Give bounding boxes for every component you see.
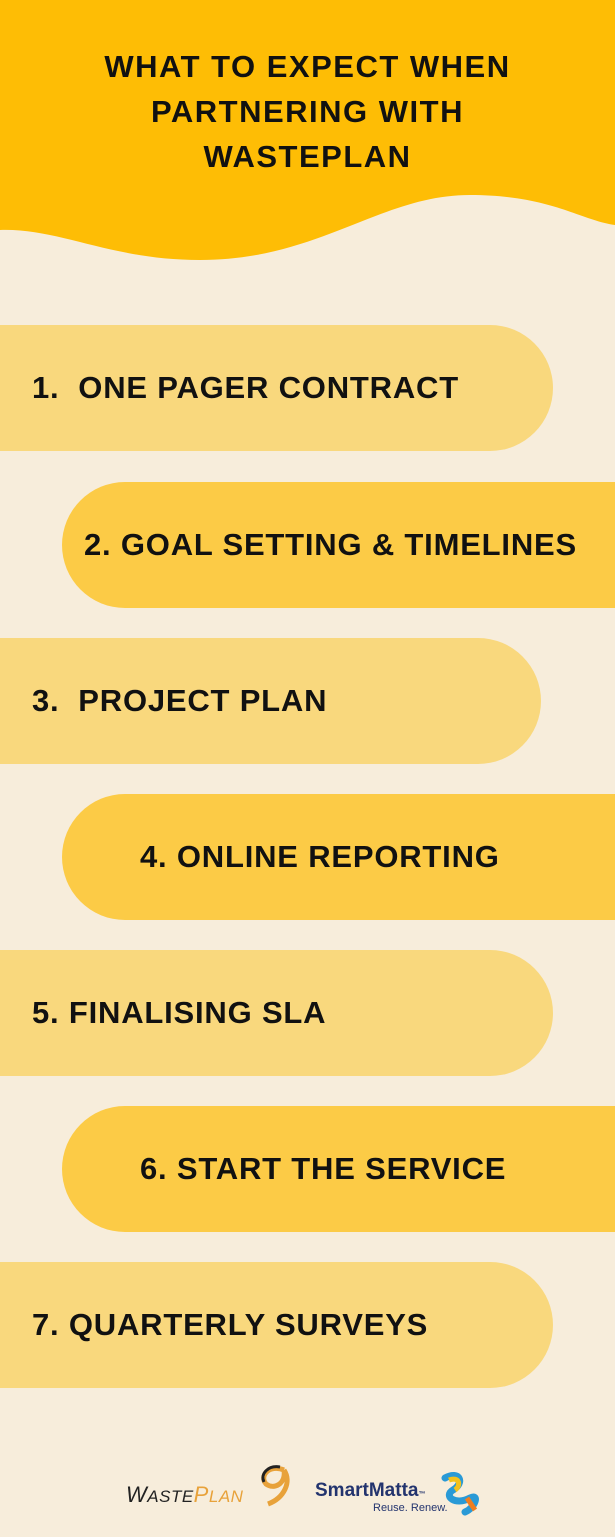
step 3: 3. PROJECT PLAN [32, 683, 327, 718]
logo: WastePlan [126, 1465, 290, 1507]
logo: SmartMatta: Reuse. Renew. [373, 1502, 448, 1514]
title [104, 49, 511, 174]
step 4 [62, 794, 615, 920]
title: WHAT TO EXPECT WHEN [104, 49, 511, 84]
logo: SmartMatta: SmartMatta™ [315, 1480, 425, 1501]
step 1 [0, 325, 553, 451]
step 4: 4. ONLINE REPORTING [140, 839, 500, 874]
step 7 [0, 1262, 553, 1388]
logo: WastePlan: WASTEPLAN [126, 1482, 243, 1507]
step 1: 1. ONE PAGER CONTRACT [32, 370, 459, 405]
logo: SmartMatta [315, 1472, 479, 1516]
header wave [0, 0, 615, 260]
step 6 [62, 1106, 615, 1232]
step 5 [0, 950, 553, 1076]
step 3 [0, 638, 541, 764]
step 2: 2. GOAL SETTING & TIMELINES [84, 527, 577, 562]
step 2 [62, 482, 615, 608]
step 7: 7. QUARTERLY SURVEYS [32, 1307, 428, 1342]
step 6: 6. START THE SERVICE [140, 1151, 506, 1186]
title: PARTNERING WITH [151, 94, 464, 129]
title: WASTEPLAN [203, 139, 412, 174]
step 5: 5. FINALISING SLA [32, 995, 326, 1030]
